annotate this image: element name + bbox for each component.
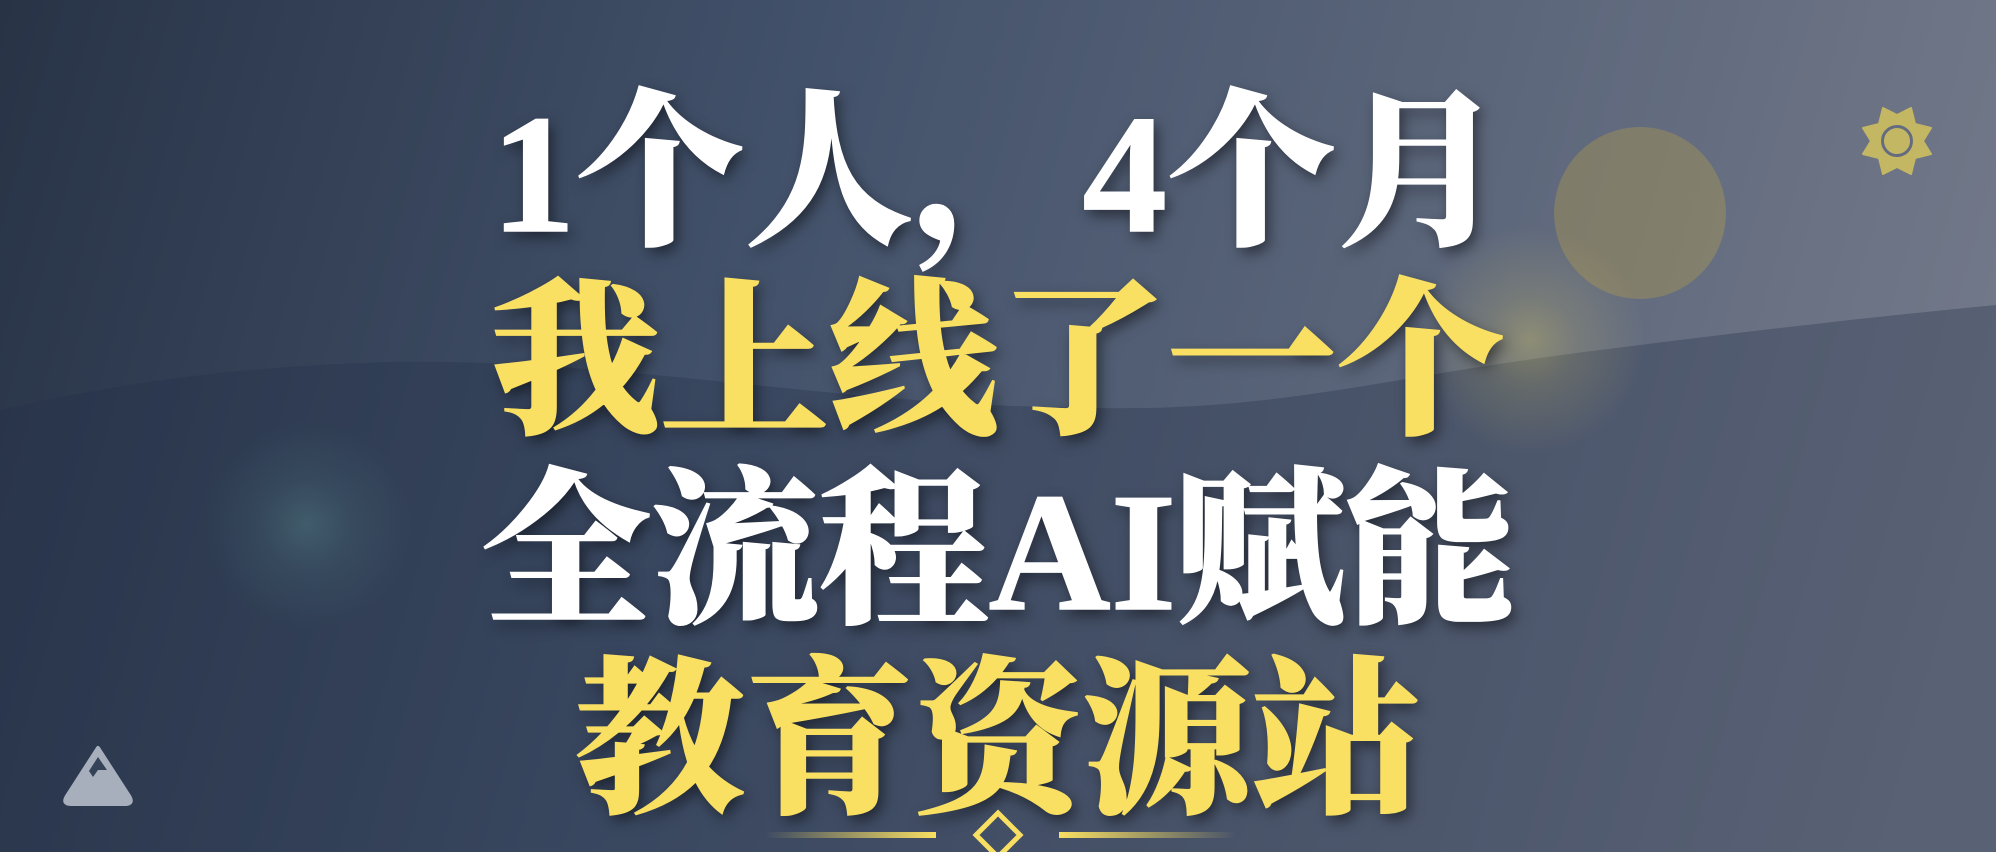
wave [0,305,1996,852]
title line 2: 我上线了一个 [491,269,1505,457]
divider ornament [772,810,1228,852]
glow: teal [202,420,412,630]
title line 4: 教育资源站 [576,648,1420,836]
title line 3: 全流程AI赋能 [482,458,1514,646]
glow: gold [1415,225,1645,455]
title line 1: 1个人，4个月 [491,80,1505,268]
gold circle [1554,127,1726,299]
icon: mountain [65,748,131,804]
icon: sun [1863,108,1931,174]
